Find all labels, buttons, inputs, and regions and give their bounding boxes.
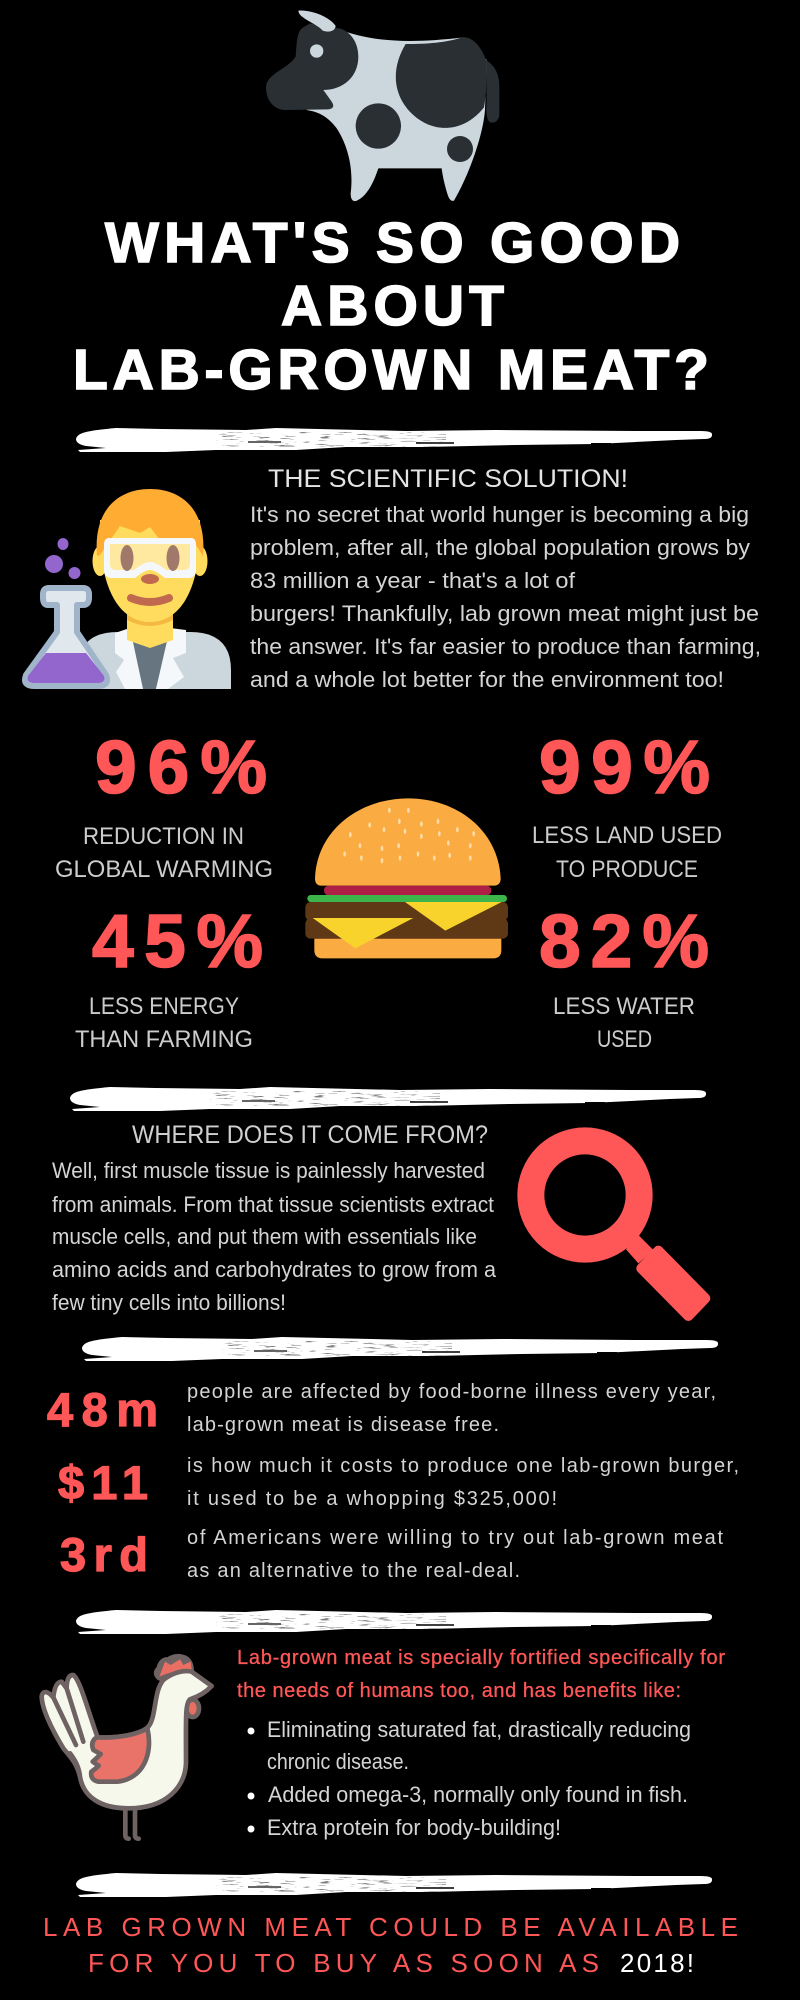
closing statement: LAB GROWN MEAT COULD BE AVAILABLE [43,1912,738,1942]
stat: 48m: people are affected by food-borne illness every year, [187,1381,716,1403]
stat: 48m: lab-grown meat is disease free. [187,1414,499,1436]
intro text: the needs of humans too, and has benefits like: [237,1680,681,1702]
stat: $11: is how much it costs to produce one lab-grown burger, [187,1455,739,1477]
bullet list [248,1717,691,1840]
stat: 48m: 48m [47,1383,158,1436]
text block: from animals. From that tissue scientists extract [52,1192,494,1217]
icon: cow [266,11,499,201]
bullet list: chronic disease. [267,1749,409,1774]
text block: problem, after all, the global population grows by [250,535,750,560]
text block: and a whole lot better for the environment too! [250,667,724,692]
title [73,211,709,402]
stat: 45%: 45% [92,899,263,983]
stat: 82%: 82% [539,899,709,983]
stat: 82%: LESS WATER [553,993,695,1020]
text block: Well, first muscle tissue is painlessly harvested [52,1158,485,1183]
panel: key numbers [47,1381,739,1582]
stat: 99%: 99% [539,725,710,809]
stat: 3rd [60,1527,723,1582]
stat: 96%: 96% [95,725,267,809]
bullet list: Eliminating saturated fat, drastically reducing [267,1717,691,1742]
text block: the answer. It's far easier to produce than farming, [250,634,761,659]
stat: 99% [532,725,722,883]
stat: 96% [55,725,273,883]
stat: 48m [47,1381,716,1436]
stat: 3rd: 3rd [60,1528,148,1581]
stat: 82%: USED [597,1026,652,1053]
stat: 45%: THAN FARMING [75,1026,253,1053]
bullet list: Added omega-3, normally only found in fish. [268,1782,688,1807]
closing statement: 2018! [620,1948,694,1978]
icon: scientist with flask [25,489,231,689]
text block: few tiny cells into billions! [52,1290,286,1315]
text block [52,1158,497,1315]
panel: statistics with burger [55,725,722,1053]
icon: chicken [42,1656,212,1839]
stat: $11: it used to be a whopping $325,000! [187,1488,557,1510]
text block: It's no secret that world hunger is becoming a big [250,502,749,527]
title: LAB-GROWN MEAT? [73,338,709,402]
title: ABOUT [281,274,504,338]
text block: muscle cells, and put them with essentials like [52,1224,477,1249]
stat: 96%: GLOBAL WARMING [55,856,273,883]
stat: 96%: REDUCTION IN [83,823,244,850]
stat: 3rd: as an alternative to the real-deal. [187,1560,520,1582]
text block: 83 million a year - that's a lot of [250,568,576,593]
heading: THE SCIENTIFIC SOLUTION! [268,465,628,493]
stat: $11 [58,1455,739,1510]
stat: 82% [539,899,709,1053]
bullet list: Extra protein for body-building! [267,1815,561,1840]
text block: amino acids and carbohydrates to grow from a [52,1257,497,1282]
panel: the scientific solution [25,465,761,692]
stat: $11: $11 [58,1456,148,1509]
icon: burger [305,798,508,958]
heading: WHERE DOES IT COME FROM? [132,1121,488,1149]
stat: 45% [75,899,263,1053]
text block: burgers! Thankfully, lab grown meat might just be [250,601,759,626]
stat: 45%: LESS ENERGY [89,993,239,1020]
title: WHAT'S SO GOOD [105,211,680,275]
closing statement: FOR YOU TO BUY AS SOON AS [88,1948,599,1978]
intro text: Lab-grown meat is specially fortified specifically for [237,1647,725,1669]
icon: magnifying glass [531,1141,705,1316]
closing statement [43,1912,738,1978]
panel: where does it come from [52,1121,705,1316]
stat: 99%: TO PRODUCE [556,856,698,883]
panel: benefits [42,1647,725,1840]
stat: 99%: LESS LAND USED [532,822,722,849]
stat: 3rd: of Americans were willing to try out lab-grown meat [187,1527,723,1549]
intro text [237,1647,725,1702]
text block [250,502,761,692]
